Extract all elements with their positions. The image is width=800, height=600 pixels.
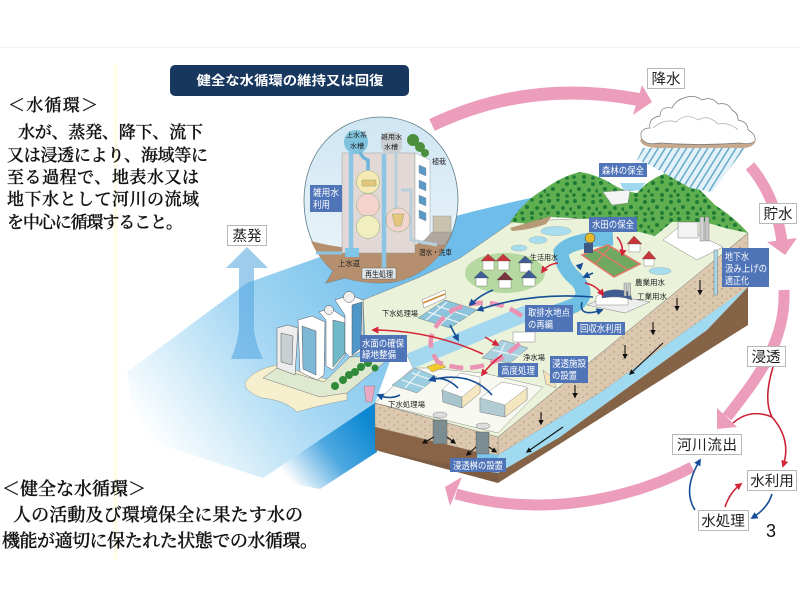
inset labels: 潜水・洗車 [419,247,452,257]
inset labels: 水槽 [384,142,399,151]
cycle stage labels: 水利用 [750,473,794,490]
cycle stage labels: 浸透 [752,349,781,366]
label: groundwater pumping: 適正化 [725,275,749,287]
arrow: evaporation to precipitation [432,85,652,125]
facility captions: 浄水場 [523,352,545,362]
rooftop greenery [407,134,429,157]
inset labels: 水槽 [350,141,365,150]
label: infiltration facility: 浸透施設 [552,358,586,370]
rain [637,148,745,192]
label: groundwater pumping [722,248,769,287]
dashed reuse loop [431,303,522,368]
text block: definition of healthy water cycle [2,479,318,551]
usage icons [356,170,410,238]
river [525,238,613,318]
text block: definition of water cycle [7,96,208,232]
facility captions: 生活用水 [530,252,558,262]
label: paddy conservation [589,217,637,232]
text block: definition of healthy water cycle: 人の活動及び環境保全に果たす水の [13,505,303,525]
label: miscellaneous water use [310,185,342,212]
cycle stage labels: 蒸発 [232,228,262,245]
label: forest conservation: 森林の保全 [602,165,644,177]
inset labels: 上水道 [338,258,360,268]
blue policy labels [360,163,769,472]
bedrock [498,287,748,483]
title banner [170,65,409,96]
text block: definition of water cycle: 水が、蒸発、降下、流下 [18,123,203,142]
facility captions: 工業用水 [637,291,667,301]
label: paddy conservation: 水田の保全 [592,219,634,231]
fountain [364,386,375,402]
water purification plant [482,332,535,363]
text block: definition of water cycle: ＜水循環＞ [8,96,98,115]
facility captions: 農業用水 [635,277,665,287]
inset bubble: building water reuse [304,117,458,283]
front face soil and bedrock [375,403,498,483]
label: miscellaneous water use: 雑用水 [313,187,339,199]
arrow: storage to river outflow [717,290,784,429]
label: recovered water use: 回収水利用 [580,323,622,335]
cycle stage labels: 河川流出 [677,437,737,454]
facility captions: 下水処理場 [382,308,418,318]
label: infiltration facility [550,356,588,383]
cycle stage labels: 降水 [652,71,681,88]
inset labels: 植栽 [432,156,446,166]
ponds [511,226,671,274]
plaza [263,356,392,397]
text block: definition of water cycle: 至る過程で、地表水又は [7,168,199,187]
label: groundwater pumping: 汲み上げの [725,263,767,275]
label: advanced treatment: 高度処理 [501,365,535,377]
land surface [363,215,748,437]
cycle stage labels [228,68,796,530]
label: groundwater pumping: 地下水 [725,251,749,263]
label: water surface and green space: 水面の確保 [362,338,404,350]
building [342,153,452,253]
label: miscellaneous water use: 利用 [313,199,330,211]
arrow: precipitation to storage [750,166,797,255]
title banner: 健全な水循環の維持又は回復 [196,73,384,88]
arrow: evaporation [226,247,268,359]
lower district [375,362,556,433]
ocean [127,197,535,489]
underground river [498,287,748,473]
inset labels [338,130,452,279]
terrain block [363,172,748,483]
label: intake and discharge reorganisation [525,305,573,332]
label: intake and discharge reorganisation: の再編 [528,319,553,331]
label: infiltration basin: 浸透桝の設置 [453,460,503,472]
inset labels: 上水系 [346,130,368,139]
hills [510,172,748,236]
tanks [316,130,437,268]
label: water surface and green space [360,335,407,362]
panel: water cycle diagram [127,68,797,530]
landslide slope [510,216,552,231]
village [465,236,656,293]
dam and lake [603,183,645,205]
text block: definition of water cycle: 地下水として河川の流域 [7,190,199,209]
facility captions [382,252,667,409]
red flow arrows [373,237,622,375]
arrow: river outflow to sea [445,467,692,506]
underground [311,232,452,283]
inset labels: 雑用水 [381,132,403,141]
label: infiltration facility: の設置 [552,371,577,382]
infiltration pits [433,412,490,454]
text block: definition of healthy water cycle: 機能が適切に保たれた状態での水循環。 [2,531,318,551]
text block: definition of water cycle: 又は浸透により、海域等に [7,146,208,165]
upper sewage treatment plant [418,290,477,328]
text block: definition of healthy water cycle: ＜健全な水循環＞ [2,479,146,499]
cycle stage labels: 水処理 [701,513,745,530]
label: water surface and green space: 緑地整備 [362,349,396,361]
inset labels: 再生処理 [365,269,393,279]
cycle stage labels: 貯水 [764,206,793,223]
sand island [245,365,347,412]
blue flow arrows [378,264,602,398]
text block: definition of water cycle: を中心に循環すること。 [7,213,183,232]
city towers on the shore [245,292,392,412]
rice paddies [582,233,640,277]
factory [587,283,650,313]
black flow arrows [423,280,700,455]
cloud [640,96,755,148]
page number: 3 [766,521,776,541]
facility captions: 下水処理場 [388,399,425,409]
power plant [663,217,723,295]
canal [410,313,527,361]
roadside trees [331,359,378,390]
right side soil face [498,233,748,455]
pink cycle arrows [432,85,797,506]
label: intake and discharge reorganisation: 取排水地点 [528,307,570,319]
small cycle arrows [690,367,786,518]
